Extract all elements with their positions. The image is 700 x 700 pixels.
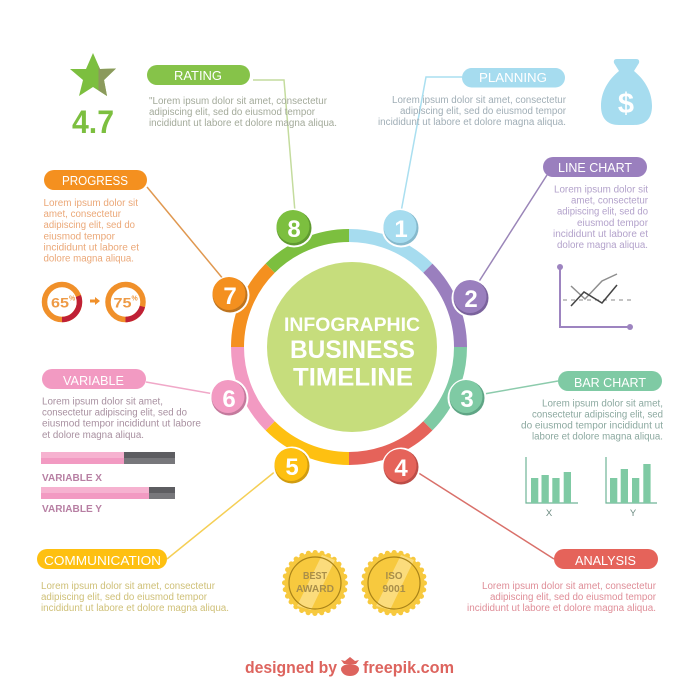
center title circle: BUSINESS: [290, 336, 415, 364]
bubble 1: 1: [394, 216, 408, 243]
bar: variable y: [41, 487, 175, 515]
panel: progress: [44, 170, 147, 264]
panel: progress: PROGRESS: [62, 173, 128, 188]
panel: bar chart: BAR CHART: [574, 375, 646, 390]
panel: variable: et dolore magna aliqua.: [42, 430, 144, 441]
bubble 5: 5: [285, 454, 299, 481]
bar chart x: X: [546, 508, 553, 519]
panel: analysis: ANALYSIS: [575, 553, 636, 568]
panel: line chart: amet, consectetur: [571, 196, 649, 206]
bubble 3: 3: [460, 386, 474, 413]
ring: timeline segments: [238, 236, 460, 458]
badge: best award: [284, 552, 346, 614]
panel: planning: PLANNING: [479, 70, 547, 85]
center title circle: TIMELINE: [293, 364, 413, 392]
footer credit: freepik.com: [363, 658, 454, 677]
panel: progress: incididunt ut labore et: [44, 242, 139, 254]
line chart: [557, 264, 633, 330]
panel: analysis: adipiscing elit, sed do eiusmod tempor: [490, 592, 657, 603]
donut charts: 65% to 75%: %: [69, 296, 76, 302]
panel: communication: COMMUNICATION: [44, 553, 161, 568]
icon: money bag: [601, 59, 652, 125]
panel: analysis: [467, 549, 658, 614]
badge: iso 9001: ISO: [386, 571, 403, 582]
panel: analysis: incididunt ut labore et dolore magna aliqua.: [467, 603, 656, 614]
connector lines: [146, 77, 558, 559]
panel: planning: incididunt ut labore et dolore magna aliqua.: [378, 117, 566, 128]
donut charts: 65% to 75%: 75: [114, 294, 132, 310]
bar: variable x: VARIABLE X: [42, 472, 102, 484]
bubble 8: [274, 208, 314, 248]
panel: analysis: Lorem ipsum dolor sit amet, consectetur: [482, 581, 657, 592]
footer credit: designed by: [245, 658, 338, 677]
panel: line chart: LINE CHART: [558, 160, 632, 175]
bubble 2: 2: [464, 286, 478, 313]
panel: communication: incididunt ut labore et dolore magna aliqua.: [41, 603, 229, 614]
bubble 4: 4: [394, 455, 408, 482]
panel: communication: Lorem ipsum dolor sit amet, consectetur: [41, 581, 216, 592]
bubble 5: [272, 446, 312, 486]
panel: rating: "Lorem ipsum dolor sit amet, consectetur: [149, 96, 328, 107]
panel: communication: [37, 549, 229, 614]
bubble 8: 8: [287, 216, 301, 243]
bubble 2: [452, 278, 490, 318]
panel: variable: [42, 369, 201, 441]
bar chart y: [606, 457, 657, 519]
panel: bar chart: consectetur adipiscing elit, sed: [532, 410, 663, 420]
panel: variable: Lorem ipsum dolor sit amet,: [42, 396, 163, 408]
panel: communication: adipiscing elit, sed do eiusmod tempor: [41, 592, 208, 603]
panel: bar chart: labore et dolore magna aliqua.: [532, 432, 663, 442]
panel: line chart: dolore magna aliqua.: [557, 240, 648, 251]
panel: line chart: adipiscing elit, sed do: [557, 206, 648, 218]
center title circle: INFOGRAPHIC: [284, 314, 420, 336]
panel: line chart: eiusmod tempor: [577, 218, 649, 229]
donut charts: 65% to 75%: %: [132, 296, 138, 302]
panel: line chart: incididunt ut labore et: [553, 229, 648, 240]
panel: bar chart: do eiusmod tempor incididunt ut: [521, 420, 663, 432]
bubble 1: [382, 208, 420, 248]
bar chart y: Y: [630, 508, 637, 519]
footer credit: [245, 657, 454, 677]
icon: star rating: 4.7: [72, 104, 114, 140]
panel: variable: VARIABLE: [63, 373, 124, 388]
donut charts: 65% to 75%: 65: [51, 294, 69, 310]
bubble 4: [382, 448, 420, 486]
panel: progress: Lorem ipsum dolor sit: [44, 198, 138, 209]
panel: variable: eiusmod tempor incididunt ut labore: [42, 418, 201, 430]
badge: best award: AWARD: [296, 584, 334, 595]
panel: rating: RATING: [174, 68, 222, 83]
panel: line chart: [543, 157, 649, 251]
bubble 6: 6: [222, 386, 236, 413]
panel: planning: [378, 68, 567, 128]
panel: line chart: Lorem ipsum dolor sit: [554, 184, 648, 196]
panel: progress: amet, consectetur: [44, 209, 122, 220]
panel: bar chart: Lorem ipsum dolor sit amet,: [542, 398, 663, 410]
donut charts: 65% to 75%: [44, 284, 143, 320]
panel: rating: incididunt ut labore et dolore magna aliqua.: [149, 118, 337, 129]
icon: money bag: $: [618, 88, 634, 120]
panel: progress: eiusmod tempor: [44, 232, 116, 242]
panel: progress: dolore magna aliqua.: [44, 254, 134, 264]
bubble 7: [210, 276, 250, 314]
panel: progress: adipiscing elit, sed do: [44, 220, 135, 231]
badge: iso 9001: 9001: [382, 584, 406, 595]
panel: planning: adipiscing elit, sed do eiusmod tempor: [400, 106, 567, 117]
panel: bar chart: [521, 371, 663, 442]
bar: variable y: VARIABLE Y: [42, 503, 102, 515]
bubble 3: [448, 378, 486, 418]
panel: rating: adipiscing elit, sed do eiusmod tempor: [149, 107, 316, 118]
panel: planning: Lorem ipsum dolor sit amet, consectetur: [392, 95, 567, 106]
bubble 7: 7: [223, 283, 237, 310]
bar chart x: [526, 457, 578, 519]
bar: variable x: [41, 452, 175, 484]
badge: iso 9001: [364, 552, 424, 614]
panel: variable: consectetur adipiscing elit, sed do: [42, 408, 187, 418]
center title circle: [267, 262, 437, 432]
bubble 6: [210, 378, 248, 418]
panel: rating: [147, 65, 337, 129]
badge: best award: BEST: [303, 571, 327, 582]
icon: star rating: [70, 53, 116, 140]
